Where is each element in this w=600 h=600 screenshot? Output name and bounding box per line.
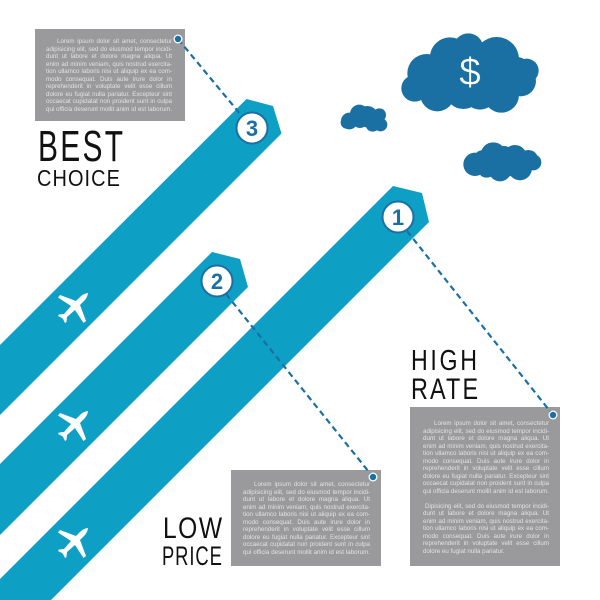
icon: small cloud right [463, 142, 541, 181]
heading: low price: PRICE [162, 540, 222, 571]
text block: bottom centre: modo consequat. Duis aute irure dolor in [243, 518, 370, 526]
text block: right: dunt ut labore et dolore magna aliqua. Ut [423, 510, 549, 517]
heading: best choice: BEST [38, 121, 123, 170]
marker 3: 3 [246, 116, 258, 141]
text block: top left: occaecat cupidatat non proident sunt in culpa [46, 98, 172, 105]
text block: right: enim ad minim veniam, quis nostrud exercita- [423, 518, 549, 524]
text block: right: qui officia deserunt mollit anim id est laborum. [423, 488, 549, 494]
text block: right: tion ullamco laboris nisi ut aliquip ex ea com- [423, 525, 549, 532]
text block: right: enim ad minim veniam, quis nostrud exercita- [423, 442, 549, 450]
text block: bottom centre: adipisicing elit, sed do eiusmod tempor incidi- [243, 488, 370, 496]
text block: right: reprehenderit in voluptate velit esse cillum [423, 540, 549, 547]
text block: bottom centre: occaecat cupidatat non proident sunt in culpa [243, 541, 370, 548]
connector line 2 [226, 294, 378, 482]
text block: bottom centre: tion ullamco laboris nisi ut aliquip ex ea com- [243, 511, 370, 518]
heading: best choice: CHOICE [37, 164, 120, 191]
text block: top left: qui officia deserunt mollit anim id est laborum. [46, 106, 172, 112]
text block: bottom centre: dolore eu fugiat nulla pariatur. Excepteur sint [243, 534, 370, 540]
text block: top left: reprehenderit in voluptate velit esse cillum [46, 83, 172, 90]
heading: high rate: HIGH [411, 343, 477, 377]
text block: top left: enim ad minim veniam, quis nostrud exercita- [46, 60, 172, 68]
marker 2 [202, 266, 232, 296]
text block: top left [46, 38, 172, 112]
text block: right: Dipisicing elit, sed do eiusmod tempor incidi- [425, 502, 549, 510]
heading: low price [162, 511, 222, 571]
text block: right: tion ullamco laboris nisi ut aliquip ex ea com- [423, 450, 549, 457]
text block: right: dunt ut labore et dolore magna aliqua. Ut [423, 435, 549, 442]
icon: small cloud left [341, 105, 387, 132]
connector line 1 [407, 231, 558, 420]
heading: best choice [37, 121, 123, 191]
text block: top left: adipisicing elit, sed do eiusmod tempor incidi- [46, 46, 172, 52]
text block: bottom centre: qui officia deserunt mollit anim id est laborum. [243, 548, 370, 556]
panel: text box bottom centre [231, 470, 381, 566]
heading: low price: LOW [163, 511, 222, 545]
text block: bottom centre: enim ad minim veniam, quis nostrud exercita- [243, 504, 370, 510]
text block: right [423, 420, 549, 554]
panel: text box right [410, 407, 560, 566]
text block: top left: modo consequat. Duis aute irure dolor in [46, 76, 172, 82]
arrow band 2 [0, 252, 248, 535]
arrow band 3 [0, 99, 282, 415]
text block: top left: dolore eu fugiat nulla pariatur. Excepteur sint [46, 90, 172, 98]
marker 1 [382, 202, 414, 232]
panel: text box top left [35, 29, 185, 121]
marker 3 [236, 112, 268, 144]
text block: top left: dunt ut labore et dolore magna aliqua. Ut [46, 53, 172, 60]
marker 2: 2 [211, 269, 223, 294]
text block: right: reprehenderit in voluptate velit esse cillum [423, 465, 549, 472]
text block: top left: tion ullamco laboris nisi ut aliquip ex ea com- [46, 68, 172, 75]
text block: bottom centre [243, 481, 370, 556]
icon: large cloud with dollar sign [401, 33, 539, 113]
text block: right: modo consequat. Duis aute irure dolor in [423, 532, 549, 540]
arrow band 1 [0, 186, 429, 600]
heading: high rate: RATE [411, 372, 478, 406]
text block: right: modo consequat. Duis aute irure dolor in [423, 458, 549, 464]
text block: right: occaecat cupidatat non proident sunt in culpa [423, 480, 549, 487]
icon: plane on band 1 [58, 528, 88, 558]
heading: high rate [411, 343, 478, 406]
icon: large cloud with dollar sign: $ [459, 51, 481, 94]
icon: plane on band 2 [58, 411, 88, 441]
text block: right: Lorem ipsum dolor sit amet, consectetur [434, 420, 549, 427]
text block: bottom centre: reprehenderit in voluptate velit esse cillum [243, 526, 370, 533]
icon: plane on band 3 [58, 293, 88, 323]
text block: top left: Lorem ipsum dolor sit amet, consectetur [57, 38, 172, 45]
marker 1: 1 [392, 205, 404, 230]
connector line 3 [174, 34, 241, 115]
text block: bottom centre: dunt ut labore et dolore magna aliqua. Ut [243, 496, 370, 503]
text block: right: adipisicing elit, sed do eiusmod tempor incidi- [423, 428, 549, 434]
text block: right: dolore eu fugiat nulla pariatur. [423, 548, 505, 554]
text block: right: dolore eu fugiat nulla pariatur. Excepteur sint [423, 472, 549, 480]
text block: bottom centre: Lorem ipsum dolor sit amet, consectetur [254, 481, 370, 488]
